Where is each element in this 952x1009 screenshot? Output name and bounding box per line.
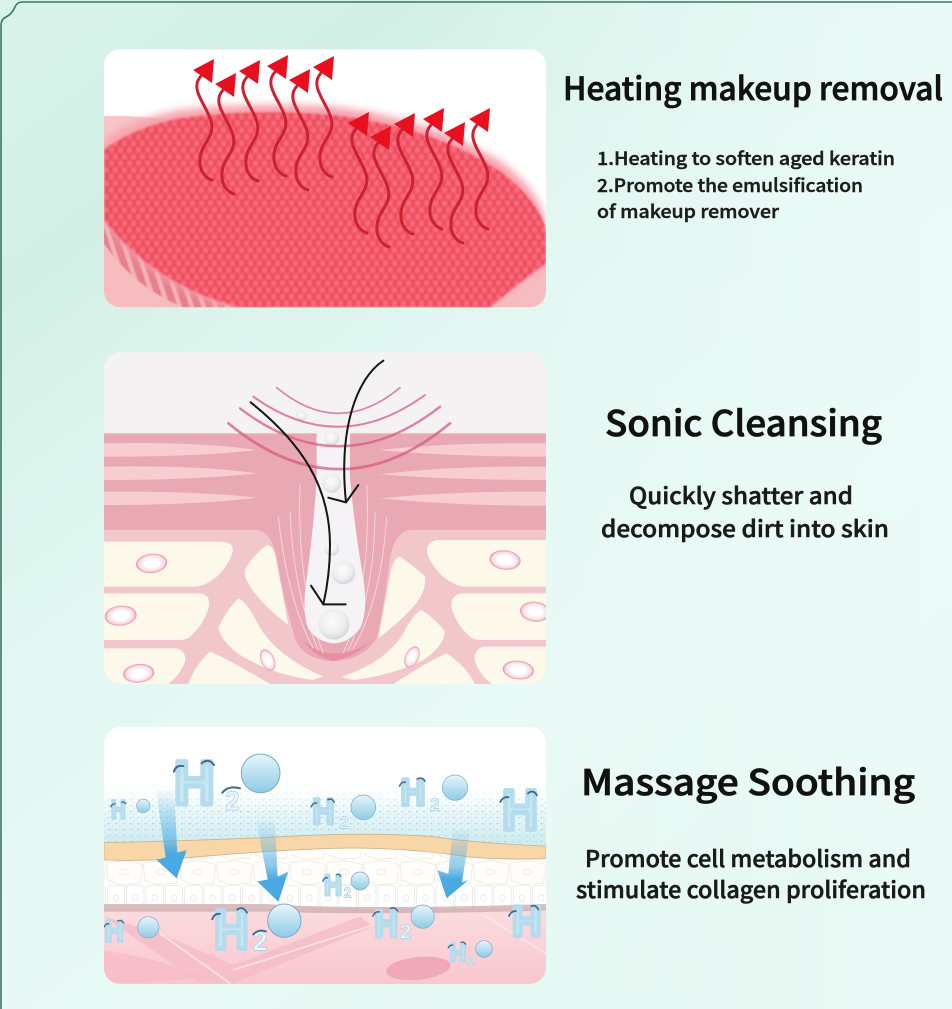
heading: sonic cleansing: Sonic Cleansing [605, 396, 882, 447]
text block: sonic description: Quickly shatter and [629, 477, 853, 511]
H2O bottom left [104, 916, 160, 943]
H2O large bottom: H [214, 898, 249, 960]
H2O bottom right: 2 [468, 953, 476, 968]
H edge lower right: H [512, 898, 541, 946]
H2O bottom middle [372, 904, 435, 939]
panel: heating brush image [104, 49, 546, 307]
text block: massage description: stimulate collagen proliferation [576, 871, 926, 905]
H2O large top: H [174, 749, 215, 818]
text block: heating benefits: 1.Heating to soften aged keratin [597, 145, 895, 171]
H2O among cells [322, 872, 370, 898]
heading: heating makeup removal: Heating makeup removal [563, 64, 943, 110]
heading: massage soothing: Massage Soothing [581, 755, 915, 806]
water speckle band [104, 802, 546, 846]
oval cells [104, 549, 551, 684]
brush bristles edge [104, 220, 240, 307]
H2O large bottom: 2 [253, 927, 267, 957]
text block: heating benefits [597, 145, 895, 224]
text block: sonic description: decompose dirt into skin [601, 510, 889, 544]
H2O right top [398, 774, 468, 811]
text block: massage description [576, 840, 926, 905]
H2O bottom middle: H [374, 903, 398, 945]
black direction arrows [251, 361, 383, 604]
brush head [104, 112, 546, 307]
H2O large bottom [211, 904, 302, 951]
text block: massage description: Promote cell metabolism and [585, 840, 911, 874]
H2O small left [110, 799, 150, 820]
panel: massage soothing skin layers [104, 727, 546, 985]
cell layer [104, 853, 546, 887]
text block: heating benefits: 2.Promote the emulsification [597, 172, 863, 198]
H2O bottom right [448, 940, 493, 966]
follicle hairlines [278, 485, 387, 653]
H2O middle top: 2 [339, 812, 349, 832]
H2O right top: H [401, 771, 425, 813]
fat cells [104, 540, 546, 684]
H2O right top: 2 [430, 795, 440, 815]
tan stratum layer [104, 834, 546, 860]
H2O bottom middle: 2 [400, 921, 411, 943]
dermis [104, 909, 546, 985]
H2O middle top: H [312, 792, 334, 831]
heat arrows [193, 55, 490, 247]
H edge lower right [508, 904, 541, 938]
H2O middle top [310, 794, 376, 829]
dirt bubbles [297, 411, 355, 640]
follicle base shading [303, 640, 372, 661]
sonic wave arcs [228, 388, 450, 469]
pore channel [305, 433, 365, 643]
H2O large top: 2 [225, 786, 240, 816]
H2O among cells: H [324, 870, 342, 902]
blue arrows [156, 790, 470, 902]
text block: sonic description [601, 477, 889, 544]
text block: heating benefits: of makeup remover [597, 198, 780, 224]
panel: sonic cleansing skin diagram [104, 352, 551, 684]
H2O small left: H [111, 795, 126, 825]
H2O large top [173, 754, 280, 810]
H edge right [499, 788, 538, 832]
H2O bottom right: H [450, 937, 466, 967]
H2O molecules [104, 749, 541, 968]
H2O bottom left: H [105, 915, 124, 948]
skin bands [104, 433, 546, 661]
brush glow edge [104, 105, 546, 307]
H edge right: H [502, 779, 538, 842]
H2O among cells: 2 [343, 885, 351, 901]
